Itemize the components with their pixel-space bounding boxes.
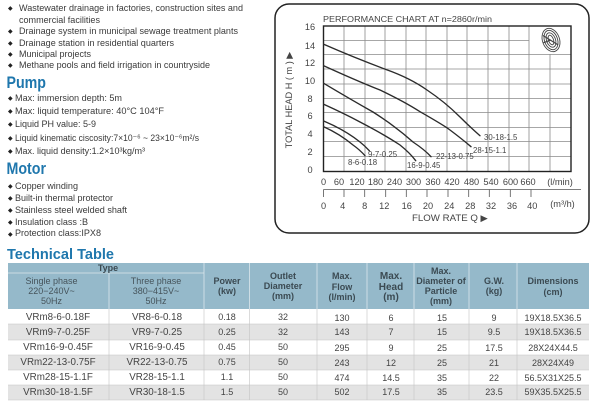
y axis labels bbox=[305, 22, 315, 175]
table header text: Power bbox=[213, 276, 241, 286]
table row: 8-6-0.18: VR8-6-0.18 bbox=[132, 312, 183, 323]
table row: 9-7-0.25 bbox=[26, 327, 582, 338]
table row: 8-6-0.18: 15 bbox=[437, 313, 447, 323]
table header text: Diameter bbox=[264, 281, 303, 291]
text block: applications list: ◆ bbox=[8, 5, 13, 12]
table row: 22-13-0.75: 21 bbox=[489, 358, 499, 368]
x axis: l/min labels: 60 bbox=[334, 177, 344, 187]
panel border bbox=[275, 4, 589, 233]
table row: 16-9-0.45 bbox=[23, 342, 578, 353]
table row: 9-7-0.25: 32 bbox=[278, 327, 288, 337]
x axis title: FLOW RATE Q ▶ bbox=[412, 213, 488, 223]
text block: pump specs: ◆ bbox=[8, 121, 13, 128]
x axis: m3/h labels: 20 bbox=[423, 201, 433, 211]
table row: 28-15-1.1: 50 bbox=[278, 372, 288, 382]
text block: pump specs: ◆ bbox=[8, 148, 13, 155]
table row: 8-6-0.18: 19X18.5X36.5 bbox=[524, 313, 582, 323]
x axis: l/min labels: 180 bbox=[368, 177, 383, 187]
y axis labels: 2 bbox=[307, 147, 313, 157]
table row: 22-13-0.75: 50 bbox=[278, 357, 288, 367]
table row: 28-15-1.1: VRm28-15-1.1F bbox=[23, 372, 93, 383]
x axis: m3/h labels: 16 bbox=[402, 201, 412, 211]
table row: 16-9-0.45: 50 bbox=[278, 342, 288, 352]
text block: pump specs: ◆ bbox=[8, 108, 13, 115]
curve labels: 30-18-1.5 bbox=[484, 133, 518, 142]
table row: 9-7-0.25: 15 bbox=[437, 327, 447, 337]
performance curves bbox=[324, 44, 480, 161]
table row: 28-15-1.1: VR28-15-1.1 bbox=[129, 372, 185, 383]
curve labels: 8-6-0.18 bbox=[348, 158, 377, 167]
table header text: 50Hz bbox=[41, 296, 63, 306]
table row: 28-15-1.1: 56.5X31X25.5 bbox=[524, 373, 582, 383]
table row: 30-18-1.5: 35 bbox=[437, 387, 447, 397]
text block: pump specs bbox=[8, 92, 199, 156]
x axis: m3/h labels: 24 bbox=[444, 201, 454, 211]
curve labels: 28-15-1.1 bbox=[473, 146, 506, 155]
table row: 30-18-1.5: 59X35.5X25.5 bbox=[524, 387, 582, 397]
x axis: l/min labels: 240 bbox=[387, 177, 402, 187]
table header text: Max. bbox=[332, 271, 352, 281]
table header text: Max. bbox=[380, 271, 402, 282]
technical table bbox=[8, 263, 589, 400]
y axis labels: 10 bbox=[305, 76, 315, 86]
text block: applications list: ◆ bbox=[8, 62, 13, 69]
table row: 9-7-0.25: 9.5 bbox=[488, 327, 500, 337]
y axis labels: 0 bbox=[307, 165, 313, 175]
text block: motor specs: Copper winding bbox=[15, 180, 78, 191]
table row: 9-7-0.25: 143 bbox=[334, 327, 350, 337]
x axis: m3/h labels: 8 bbox=[362, 201, 367, 211]
table row: 22-13-0.75: VR22-13-0.75 bbox=[126, 357, 188, 368]
table row: 9-7-0.25: VRm9-7-0.25F bbox=[26, 327, 90, 338]
table header background bbox=[8, 263, 589, 309]
table header text bbox=[25, 263, 579, 306]
table row: 16-9-0.45: VRm16-9-0.45F bbox=[23, 342, 93, 353]
text block: applications list: Wastewater drainage in factories, construction sites and bbox=[19, 3, 243, 14]
x axis: m3/h labels: 12 bbox=[379, 201, 389, 211]
table row: 22-13-0.75: VRm22-13-0.75F bbox=[20, 357, 96, 368]
text block: applications list: commercial facilities bbox=[19, 15, 100, 26]
table row: 22-13-0.75: 243 bbox=[334, 358, 350, 368]
text block: motor specs: Protection class:IPX8 bbox=[15, 227, 101, 238]
x axis: m3/h labels: 4 bbox=[340, 201, 345, 211]
table row: 28-15-1.1: 1.1 bbox=[221, 372, 233, 382]
table header text: (kg) bbox=[486, 286, 502, 296]
icon: impeller logo bbox=[539, 26, 563, 54]
x axis: m3/h labels: 32 bbox=[486, 201, 496, 211]
table row: 8-6-0.18 bbox=[26, 312, 582, 323]
table header text: (mm) bbox=[430, 296, 452, 306]
x axis: l/min labels: 600 bbox=[503, 177, 518, 187]
heading: Pump: Pump bbox=[6, 74, 46, 92]
text block: pump specs: Max: liquid temperature: 40°C 104°F bbox=[15, 105, 164, 116]
x axis: l/min labels: 300 bbox=[406, 177, 421, 187]
table header text: (mm) bbox=[272, 291, 294, 301]
table row: 28-15-1.1: 35 bbox=[437, 373, 447, 383]
text block: pump specs: Max: immersion depth: 5m bbox=[15, 92, 122, 103]
table row stripes bbox=[8, 324, 589, 400]
table row: 16-9-0.45: 295 bbox=[334, 343, 350, 353]
chart frame bbox=[324, 26, 571, 172]
table header text: Three phase bbox=[131, 276, 181, 286]
table row: 28-15-1.1: 14.5 bbox=[382, 373, 400, 383]
table row: 16-9-0.45: 9 bbox=[388, 343, 394, 353]
x axis: m3/h labels: 0 bbox=[321, 201, 326, 211]
y axis labels: 16 bbox=[305, 22, 315, 32]
table lines bbox=[8, 263, 517, 309]
table row: 28-15-1.1 bbox=[23, 372, 582, 383]
table row: 8-6-0.18: 9 bbox=[491, 313, 497, 323]
table header text: Type bbox=[98, 263, 118, 273]
table header text: (l/min) bbox=[328, 292, 356, 302]
x axis: l/min labels: (l/min) bbox=[547, 177, 573, 187]
y axis labels: 12 bbox=[305, 58, 315, 68]
table row: 8-6-0.18: 32 bbox=[278, 312, 288, 322]
panel: performance chart bbox=[275, 4, 589, 233]
x axis: l/min labels: 120 bbox=[349, 177, 365, 187]
text block: pump specs: ◆ bbox=[8, 95, 13, 102]
table row: 16-9-0.45: 25 bbox=[437, 343, 447, 353]
table row: 22-13-0.75: 25 bbox=[437, 358, 447, 368]
table header text: Max. bbox=[431, 266, 451, 276]
text block: pump specs: Liquid kinematic ciscosity:7×10⁻⁶ ~ 23×10⁻⁶m²/s bbox=[15, 132, 199, 143]
table row: 30-18-1.5: 17.5 bbox=[382, 387, 400, 397]
x axis: l/min labels: 660 bbox=[520, 177, 536, 187]
y axis labels: 8 bbox=[307, 94, 313, 104]
table row: 30-18-1.5: VRm30-18-1.5F bbox=[23, 387, 93, 398]
table row: 9-7-0.25: 19X18.5X36.5 bbox=[524, 327, 582, 337]
chart grid bbox=[324, 26, 571, 171]
table row: 16-9-0.45: 28X24X44.5 bbox=[528, 343, 578, 353]
table header text: (kw) bbox=[218, 286, 236, 296]
curve labels bbox=[348, 133, 518, 170]
table row: 30-18-1.5: 502 bbox=[334, 387, 350, 397]
text block: applications list bbox=[8, 3, 243, 71]
table row: 9-7-0.25: 7 bbox=[388, 327, 394, 337]
x axis: m3/h labels: (m³/h) bbox=[550, 199, 575, 209]
table row: 30-18-1.5: 1.5 bbox=[221, 387, 233, 397]
x axis scale bbox=[324, 190, 581, 197]
x axis: l/min labels: 420 bbox=[444, 177, 460, 187]
table row: 22-13-0.75: 12 bbox=[386, 358, 396, 368]
table row: 16-9-0.45: 0.45 bbox=[218, 342, 236, 352]
table row: 30-18-1.5 bbox=[23, 387, 582, 398]
chart title: PERFORMANCE CHART AT n=2860r/min bbox=[323, 14, 492, 24]
text block: motor specs: ◆ bbox=[8, 183, 13, 190]
table row: 28-15-1.1: 474 bbox=[334, 373, 350, 383]
table row: 9-7-0.25: 0.25 bbox=[218, 327, 236, 337]
table header text: Outlet bbox=[270, 271, 296, 281]
table header text: Flow bbox=[332, 282, 353, 292]
table row: 8-6-0.18: VRm8-6-0.18F bbox=[26, 312, 90, 323]
table row: 30-18-1.5: 23.5 bbox=[485, 387, 503, 397]
x axis: m3/h labels: 36 bbox=[507, 201, 517, 211]
curve labels: 22-13-0.75 bbox=[436, 152, 474, 161]
x axis: l/min labels: 480 bbox=[464, 177, 479, 187]
table row: 22-13-0.75 bbox=[20, 357, 574, 368]
table row: 8-6-0.18: 0.18 bbox=[218, 312, 236, 322]
table header text: Particle bbox=[425, 286, 457, 296]
text block: motor specs: ◆ bbox=[8, 195, 13, 202]
heading: Technical Table: Technical Table bbox=[7, 247, 114, 263]
table row: 8-6-0.18: 6 bbox=[388, 313, 394, 323]
x axis: m3/h labels: 28 bbox=[465, 201, 475, 211]
x axis: m3/h labels: 40 bbox=[527, 201, 537, 211]
table header text: G.W. bbox=[484, 276, 504, 286]
x axis: l/min labels bbox=[321, 177, 573, 187]
y axis labels: 4 bbox=[307, 129, 313, 139]
table header text: Head bbox=[379, 282, 403, 293]
text block: motor specs: Insulation class :B bbox=[15, 216, 88, 227]
table header text: Single phase bbox=[25, 276, 78, 286]
curve labels: 9-7-0.25 bbox=[368, 150, 398, 159]
text block: motor specs: Built-in thermal protector bbox=[15, 192, 113, 203]
text block: motor specs: ◆ bbox=[8, 219, 13, 226]
table header text: Diameter of bbox=[416, 276, 467, 286]
text block: applications list: ◆ bbox=[8, 40, 13, 47]
y axis labels: 6 bbox=[307, 111, 313, 121]
table row: 22-13-0.75: 0.75 bbox=[218, 357, 236, 367]
y axis labels: 14 bbox=[305, 41, 315, 51]
table header text: 220−240V~ bbox=[28, 286, 75, 296]
text block: pump specs: Liquid PH value: 5-9 bbox=[15, 118, 96, 129]
text block: pump specs: Max. liquid density:1.2×10³kg/m³ bbox=[15, 145, 145, 156]
table header text: 50Hz bbox=[145, 296, 167, 306]
table row: 16-9-0.45: VR16-9-0.45 bbox=[129, 342, 185, 353]
table row: 16-9-0.45: 17.5 bbox=[485, 343, 503, 353]
table header text: (m) bbox=[383, 292, 399, 303]
table row: 30-18-1.5: 50 bbox=[278, 387, 288, 397]
table row: 22-13-0.75: 28X24X49 bbox=[532, 358, 574, 368]
x axis: l/min labels: 360 bbox=[425, 177, 441, 187]
text block: applications list: ◆ bbox=[8, 51, 13, 58]
text block: applications list: ◆ bbox=[8, 28, 13, 35]
table row: 28-15-1.1: 22 bbox=[489, 373, 499, 383]
text block: applications list: Municipal projects bbox=[19, 49, 91, 60]
table row: 9-7-0.25: VR9-7-0.25 bbox=[132, 327, 183, 338]
table row: 30-18-1.5: VR30-18-1.5 bbox=[129, 387, 185, 398]
x axis: m3/h labels bbox=[321, 199, 575, 211]
table header text: 380−415V~ bbox=[133, 286, 179, 296]
text block: applications list: Drainage station in residential quarters bbox=[19, 38, 174, 49]
table row: 8-6-0.18: 130 bbox=[334, 313, 350, 323]
text block: motor specs: Stainless steel welded shaft bbox=[15, 204, 127, 215]
text block: motor specs: ◆ bbox=[8, 231, 13, 238]
x axis: l/min labels: 540 bbox=[483, 177, 499, 187]
table header text: (cm) bbox=[543, 287, 563, 297]
x axis: l/min labels: 0 bbox=[321, 177, 326, 187]
table header text: Dimensions bbox=[527, 276, 579, 286]
text block: motor specs bbox=[8, 180, 127, 238]
text block: applications list: Methane pools and field irrigation in countryside bbox=[19, 60, 210, 71]
text block: motor specs: ◆ bbox=[8, 207, 13, 214]
heading: Motor: Motor bbox=[6, 160, 46, 178]
y axis title: TOTAL HEAD H ( m ) ▶ bbox=[284, 52, 294, 148]
text block: applications list: Drainage system in municipal sewage treatment plants bbox=[19, 26, 238, 37]
curve labels: 16-9-0.45 bbox=[407, 161, 441, 170]
text block: pump specs: ◆ bbox=[8, 135, 13, 142]
